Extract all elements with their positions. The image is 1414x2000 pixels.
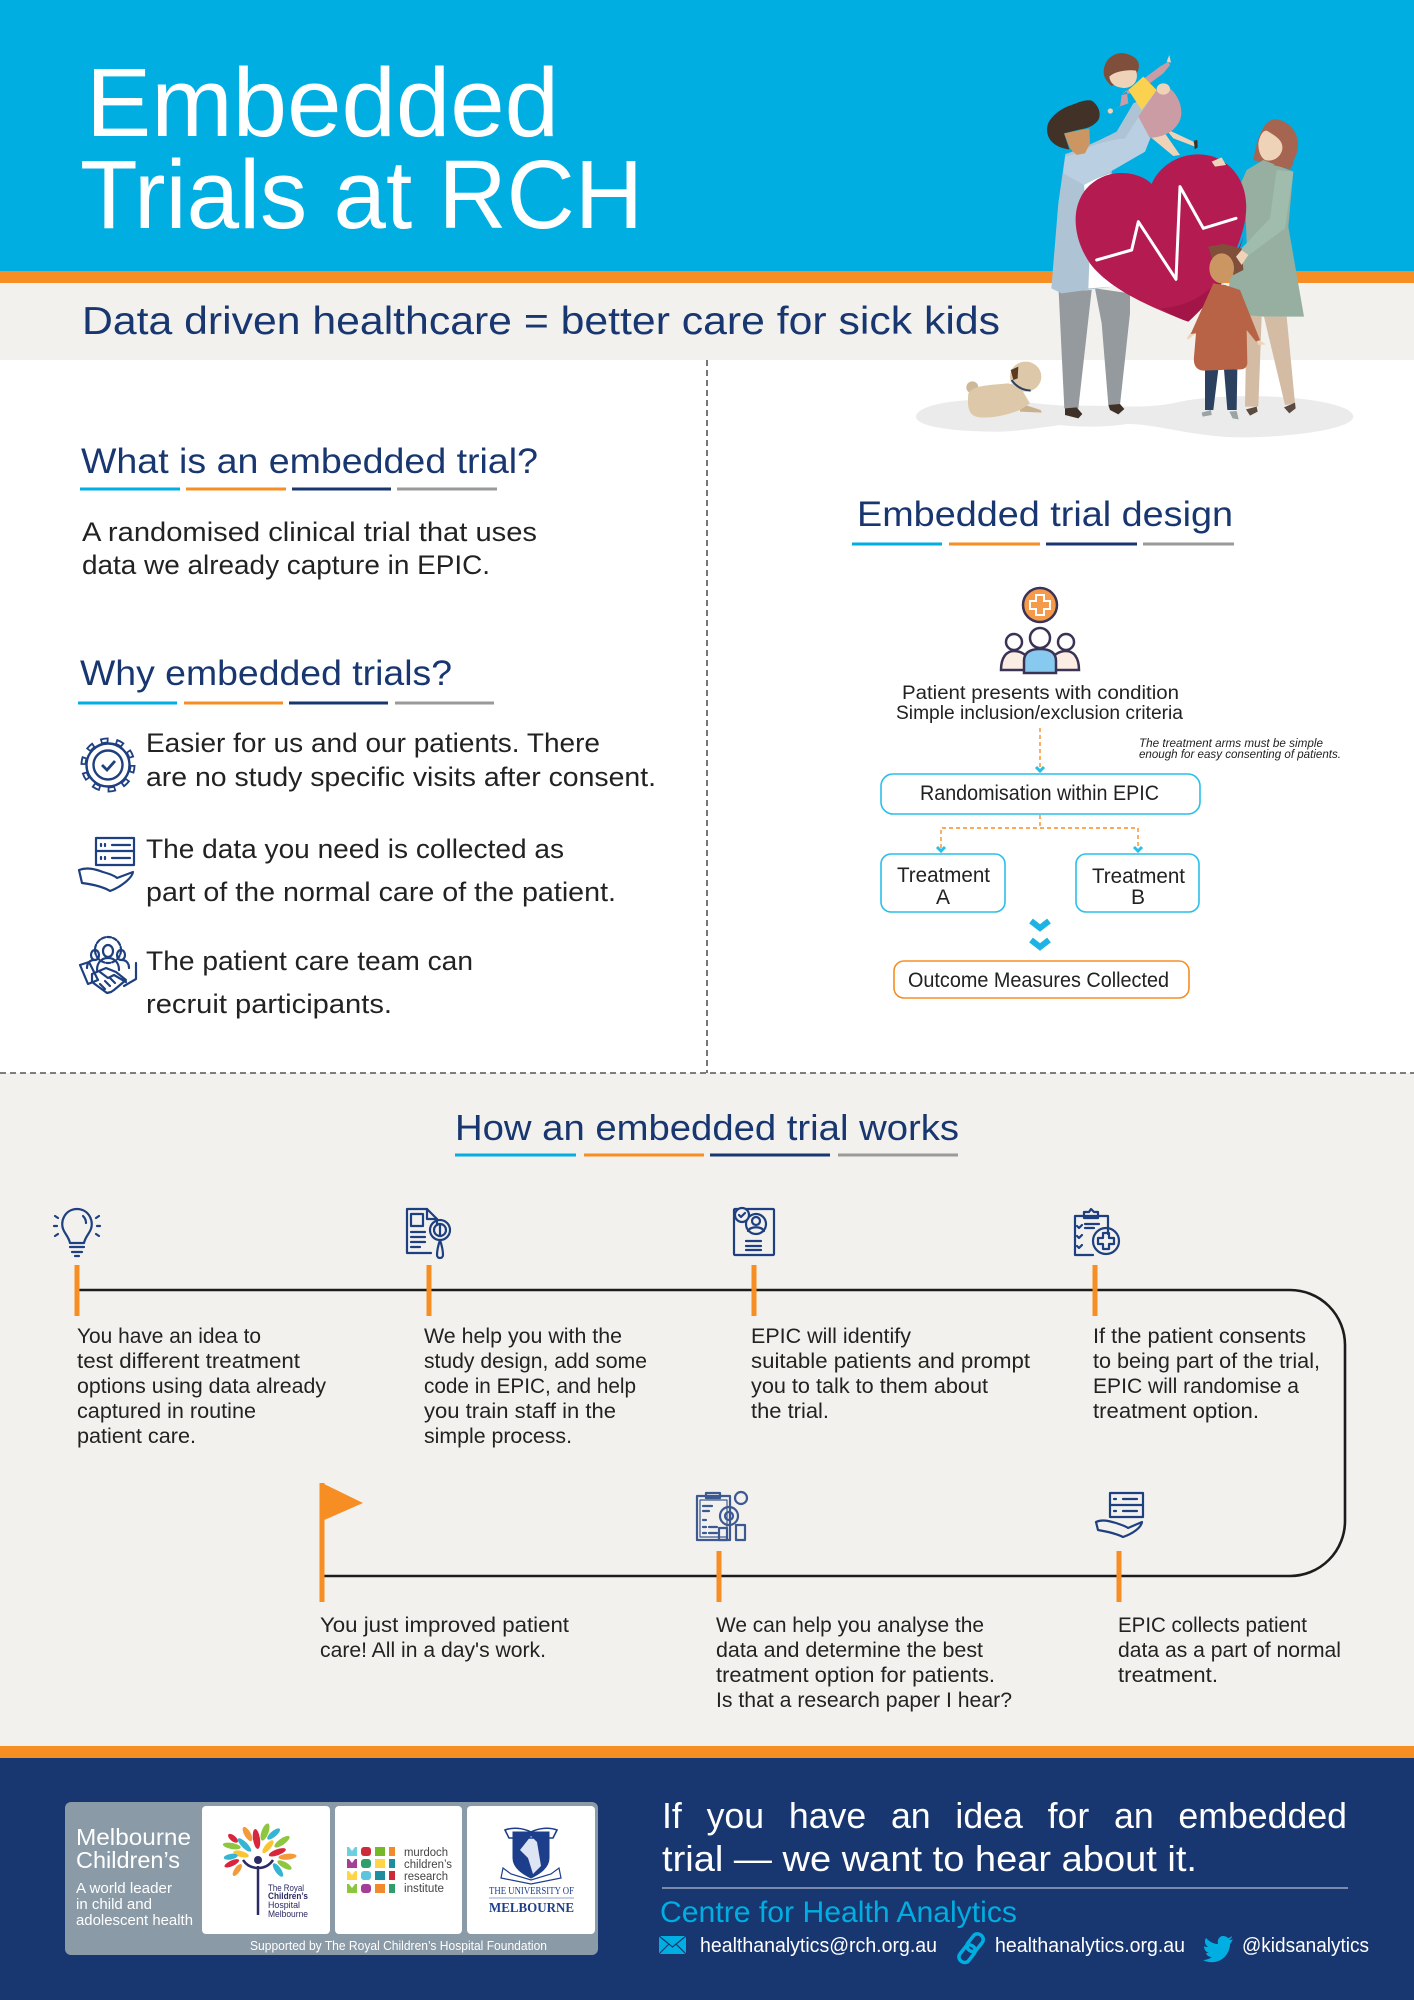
icon: patient identification [734, 1208, 774, 1255]
campus name: in child and [76, 1896, 152, 1913]
subtitle: Data driven healthcare = better care for sick kids [82, 300, 1000, 343]
arrow: patient to randomisation [1036, 728, 1044, 771]
step 3 text [751, 1325, 1030, 1423]
icon: data in hand [79, 838, 134, 891]
step 1 text: patient care. [77, 1425, 196, 1448]
step 4 text [1093, 1325, 1320, 1423]
step 5 text [1118, 1614, 1341, 1687]
step 3 text: suitable patients and prompt [751, 1350, 1030, 1373]
note: treatment arms: enough for easy consenting of patients. [1139, 749, 1341, 761]
panel: footer [0, 1746, 1414, 2000]
logo: Royal Children's Hospital: Children’s [268, 1891, 308, 1902]
step 1 text: captured in routine [77, 1400, 256, 1423]
note: treatment arms: The treatment arms must be simple [1139, 738, 1323, 750]
step 3 text: the trial. [751, 1400, 829, 1423]
step 6 text: We can help you analyse the [716, 1614, 984, 1637]
contact row [659, 1932, 1369, 1965]
icon: clipboard with cross [1075, 1209, 1119, 1255]
benefit text 2 [146, 834, 616, 907]
step: patient presents: Patient presents with condition [902, 683, 1179, 704]
heading: design: Embedded trial design [857, 495, 1233, 534]
step 3 text: EPIC will identify [751, 1325, 912, 1348]
box: randomisation [881, 774, 1200, 814]
step 7 text: You just improved patient [320, 1614, 569, 1637]
step 5 text: treatment. [1118, 1664, 1218, 1687]
step 2 text: simple process. [424, 1425, 572, 1448]
heading underline [455, 1154, 958, 1156]
campus name: Supported by The Royal Children’s Hospital Foundation [250, 1939, 547, 1953]
step 1 text [77, 1325, 327, 1448]
panel: embedded trial design [852, 495, 1341, 998]
campus name: adolescent health [76, 1912, 193, 1929]
benefit text 3 [146, 946, 473, 1019]
box: outcome measures [894, 961, 1189, 998]
arrow: double chevron [1031, 921, 1049, 947]
logo: Royal Children's Hospital [222, 1822, 308, 1920]
definition text: A randomised clinical trial that uses [82, 517, 537, 547]
step 6 text: data and determine the best [716, 1639, 983, 1662]
heading underline [78, 702, 494, 704]
heading: what is: What is an embedded trial? [81, 442, 538, 481]
divider lines [706, 360, 708, 1073]
logo: University of Melbourne: THE UNIVERSITY OF [489, 1886, 574, 1897]
title: Embedded [86, 48, 559, 157]
step 2 text [424, 1325, 647, 1448]
logo: Royal Children's Hospital: The Royal [268, 1883, 304, 1894]
box: treatment A: A [936, 886, 950, 909]
step 6 text: Is that a research paper I hear? [716, 1689, 1012, 1712]
panel: what is an embedded trial [80, 442, 538, 580]
step: patient presents: Simple inclusion/exclusion criteria [896, 703, 1183, 724]
contact row: @kidsanalytics [1242, 1935, 1369, 1957]
panel: how it works background [0, 1073, 1414, 1746]
step 2 text: code in EPIC, and help [424, 1375, 636, 1398]
contact row: healthanalytics.org.au [995, 1935, 1185, 1957]
benefit text 1: Easier for us and our patients. There [146, 728, 600, 758]
box: treatment A: Treatment [897, 864, 990, 887]
benefit text 3: The patient care team can [146, 946, 473, 976]
campus name [76, 1824, 547, 1953]
icon: data in hand [1096, 1493, 1143, 1537]
title [80, 48, 643, 249]
illustration: family holding a heart [916, 53, 1353, 437]
heading: how: How an embedded trial works [455, 1107, 959, 1148]
title: Trials at RCH [80, 140, 643, 249]
step 4 text: to being part of the trial, [1093, 1350, 1320, 1373]
panel: why embedded trials [78, 654, 656, 1019]
step 4 text: EPIC will randomise a [1093, 1375, 1299, 1398]
benefit text 1: are no study specific visits after consent. [146, 762, 656, 792]
icon: link [957, 1932, 985, 1965]
definition text [82, 517, 537, 580]
box: treatment A [881, 854, 1005, 912]
panel: how an embedded trial works [54, 1107, 1345, 1712]
logo: Murdoch Children's Research Institute: murdoch [404, 1847, 448, 1859]
logo: Murdoch Children's Research Institute [347, 1847, 452, 1895]
benefit text 2: part of the normal care of the patient. [146, 877, 616, 907]
logo: Murdoch Children's Research Institute: institute [404, 1883, 444, 1895]
heading underline [80, 488, 497, 490]
step 7 text: care! All in a day's work. [320, 1639, 546, 1662]
icon: email [659, 1936, 686, 1954]
logo panel: Melbourne Children's [65, 1802, 598, 1955]
logo: University of Melbourne: MELBOURNE [489, 1901, 574, 1916]
call to action [662, 1795, 1347, 1879]
step 1 text: options using data already [77, 1375, 327, 1398]
step 4 text: If the patient consents [1093, 1325, 1306, 1348]
benefit text 1 [146, 728, 656, 792]
step 6 text [716, 1614, 1012, 1712]
definition text: data we already capture in EPIC. [82, 550, 490, 580]
logo: University of Melbourne [489, 1828, 574, 1916]
logo: Royal Children's Hospital: Hospital [268, 1900, 300, 1911]
call to action: If you have an idea for an embedded [662, 1795, 1347, 1836]
benefit text 3: recruit participants. [146, 989, 392, 1019]
campus name: Melbourne [76, 1824, 191, 1850]
arrow: branch to treatments [937, 815, 1142, 851]
heading: why: Why embedded trials? [80, 654, 452, 693]
campus name: Children’s [76, 1847, 180, 1873]
centre name: Centre for Health Analytics [660, 1896, 1017, 1929]
step 1 text: test different treatment [77, 1350, 300, 1373]
logo: Murdoch Children's Research Institute: research [404, 1871, 448, 1883]
note: treatment arms [1139, 738, 1341, 761]
timeline path [77, 1290, 1345, 1576]
step 1 text: You have an idea to [77, 1325, 261, 1348]
icon: document with magnifier [407, 1209, 450, 1258]
step 3 text: you to talk to them about [751, 1375, 988, 1398]
icon: analysis clipboard [697, 1492, 747, 1540]
timeline ticks [74, 1265, 1122, 1602]
icon: care team handshake [80, 937, 136, 993]
step 2 text: you train staff in the [424, 1400, 616, 1423]
step 5 text: EPIC collects patient [1118, 1614, 1307, 1637]
box: treatment B: Treatment [1092, 865, 1185, 888]
logo: Murdoch Children's Research Institute: children’s [404, 1859, 452, 1871]
step 5 text: data as a part of normal [1118, 1639, 1341, 1662]
icon: twitter bird [1203, 1936, 1233, 1962]
icon: patients with medical cross [1001, 588, 1079, 673]
icon: light bulb [54, 1209, 100, 1256]
step 2 text: study design, add some [424, 1350, 647, 1373]
icon: gear with check [84, 740, 132, 790]
box: treatment B [1076, 854, 1199, 912]
icon: finish flag [320, 1483, 363, 1602]
logo: Royal Children's Hospital: Melbourne [268, 1909, 308, 1920]
box: randomisation: Randomisation within EPIC [920, 782, 1159, 805]
panel: header banner [0, 0, 1414, 360]
step: patient presents [896, 683, 1183, 724]
call to action: trial — we want to hear about it. [662, 1838, 1197, 1879]
step 6 text: treatment option for patients. [716, 1664, 995, 1687]
step 4 text: treatment option. [1093, 1400, 1259, 1423]
box: treatment B: B [1131, 886, 1145, 909]
heading underline [852, 542, 1234, 546]
contact row: healthanalytics@rch.org.au [700, 1935, 937, 1957]
campus name: A world leader [76, 1880, 172, 1897]
benefit text 2: The data you need is collected as [146, 834, 564, 864]
box: outcome measures: Outcome Measures Collected [908, 969, 1169, 992]
step 7 text [320, 1614, 569, 1662]
step 2 text: We help you with the [424, 1325, 622, 1348]
